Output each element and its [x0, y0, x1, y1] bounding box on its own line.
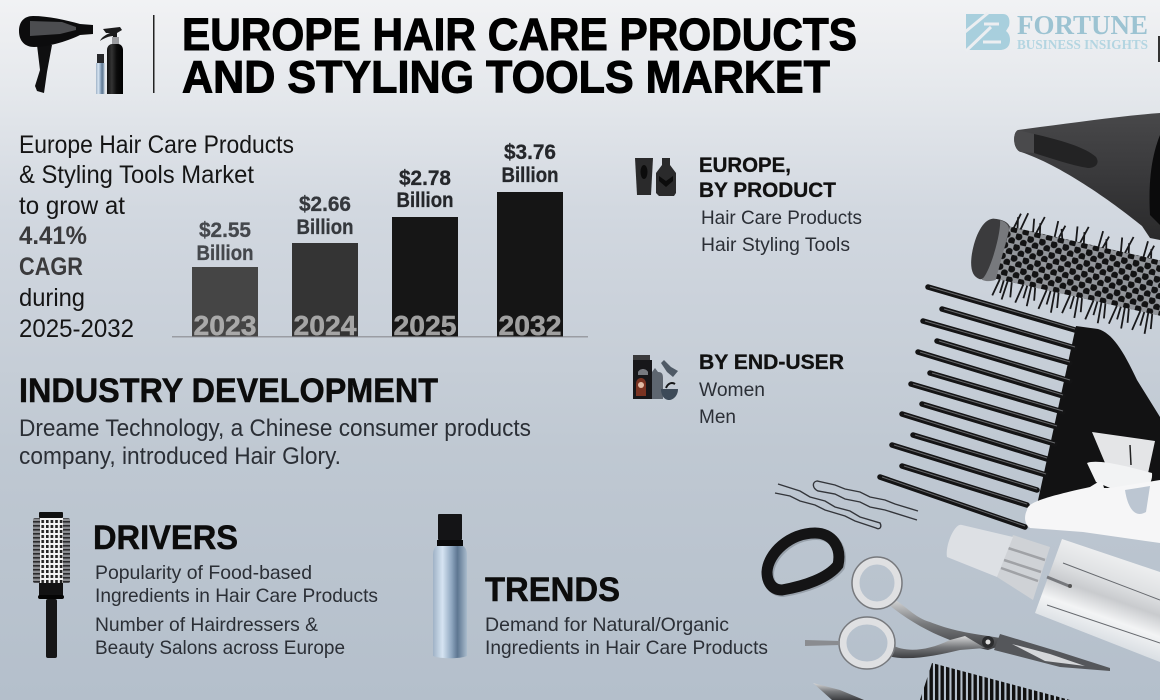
bar 2025 [392, 167, 458, 341]
bar 2023: Billion [196, 242, 254, 265]
industry development [19, 372, 531, 470]
trends: Ingredients in Hair Care Products [485, 637, 768, 659]
bar 2024 [292, 193, 358, 341]
growth statement: to grow at [19, 192, 125, 220]
trends [485, 571, 768, 659]
drivers: Number of Hairdressers & [95, 614, 318, 636]
photo: metal clip [813, 683, 864, 700]
by product segment: Hair Styling Tools [701, 235, 850, 256]
growth statement: 4.41% [19, 222, 87, 250]
drivers: Ingredients in Hair Care Products [95, 585, 378, 607]
by product segment [699, 154, 862, 256]
header divider [153, 15, 154, 93]
header icon: hair dryer and spray bottles [19, 16, 123, 94]
bar 2032: Billion [502, 164, 558, 187]
logo: Fortune Business Insights: FORTUNE [1017, 10, 1148, 40]
growth statement: CAGR [19, 253, 83, 281]
photo: spray bottle [947, 525, 1160, 662]
bar 2025: $2.78 [399, 167, 451, 190]
by end-user segment: Women [699, 380, 765, 401]
bar 2023: 2023 [194, 310, 256, 341]
photo: fine comb [920, 663, 1070, 700]
drivers: Popularity of Food-based [95, 562, 312, 584]
drivers: Beauty Salons across Europe [95, 637, 345, 659]
bar chart [172, 141, 588, 341]
photo: hair dryer [1014, 36, 1160, 240]
photo: wide-tooth comb [880, 287, 1160, 527]
by end-user segment: BY END-USER [699, 351, 844, 374]
industry development: Dreame Technology, a Chinese consumer products [19, 415, 531, 442]
bar 2023 [192, 219, 258, 341]
bar 2024: 2024 [294, 310, 357, 341]
bar 2032: $3.76 [504, 141, 556, 164]
photo: hair tie [767, 533, 840, 592]
logo: Fortune Business Insights [965, 10, 1148, 53]
title: AND STYLING TOOLS MARKET [182, 52, 830, 102]
by end-user segment: Men [699, 407, 736, 428]
by product segment: Hair Care Products [701, 208, 862, 229]
photo: white hair clip [1025, 432, 1160, 543]
by end-user segment [699, 351, 844, 428]
bar 2024: $2.66 [299, 193, 351, 216]
bar 2025: Billion [396, 189, 454, 212]
photo: hair pins [775, 481, 918, 529]
bar 2025: 2025 [394, 310, 456, 341]
industry development: INDUSTRY DEVELOPMENT [19, 372, 438, 410]
icon: product tube and bottle [635, 158, 676, 196]
photo: round brush [963, 203, 1160, 341]
by product segment: BY PRODUCT [699, 179, 836, 202]
growth statement: 2025-2032 [19, 315, 134, 343]
photo: scissors [805, 557, 1110, 671]
by product segment: EUROPE, [699, 154, 791, 177]
icon: hair dye kit [633, 355, 678, 400]
growth statement: during [19, 284, 85, 312]
bar 2024: Billion [296, 216, 354, 239]
logo: Fortune Business Insights: BUSINESS INSIGHTS [1017, 38, 1148, 53]
drivers [93, 519, 378, 659]
title [182, 9, 857, 102]
growth statement [19, 131, 294, 343]
growth statement: & Styling Tools Market [19, 161, 254, 189]
growth statement: Europe Hair Care Products [19, 131, 294, 159]
bar 2023: $2.55 [199, 219, 251, 242]
trends: Demand for Natural/Organic [485, 614, 729, 636]
icon: round brush [33, 512, 70, 658]
icon: hair spray can [433, 514, 467, 658]
title: EUROPE HAIR CARE PRODUCTS [182, 9, 857, 60]
trends: TRENDS [485, 571, 620, 609]
industry development: company, introduced Hair Glory. [19, 443, 341, 470]
bar 2032 [497, 141, 563, 341]
bar 2032: 2032 [498, 310, 562, 341]
drivers: DRIVERS [93, 519, 238, 557]
